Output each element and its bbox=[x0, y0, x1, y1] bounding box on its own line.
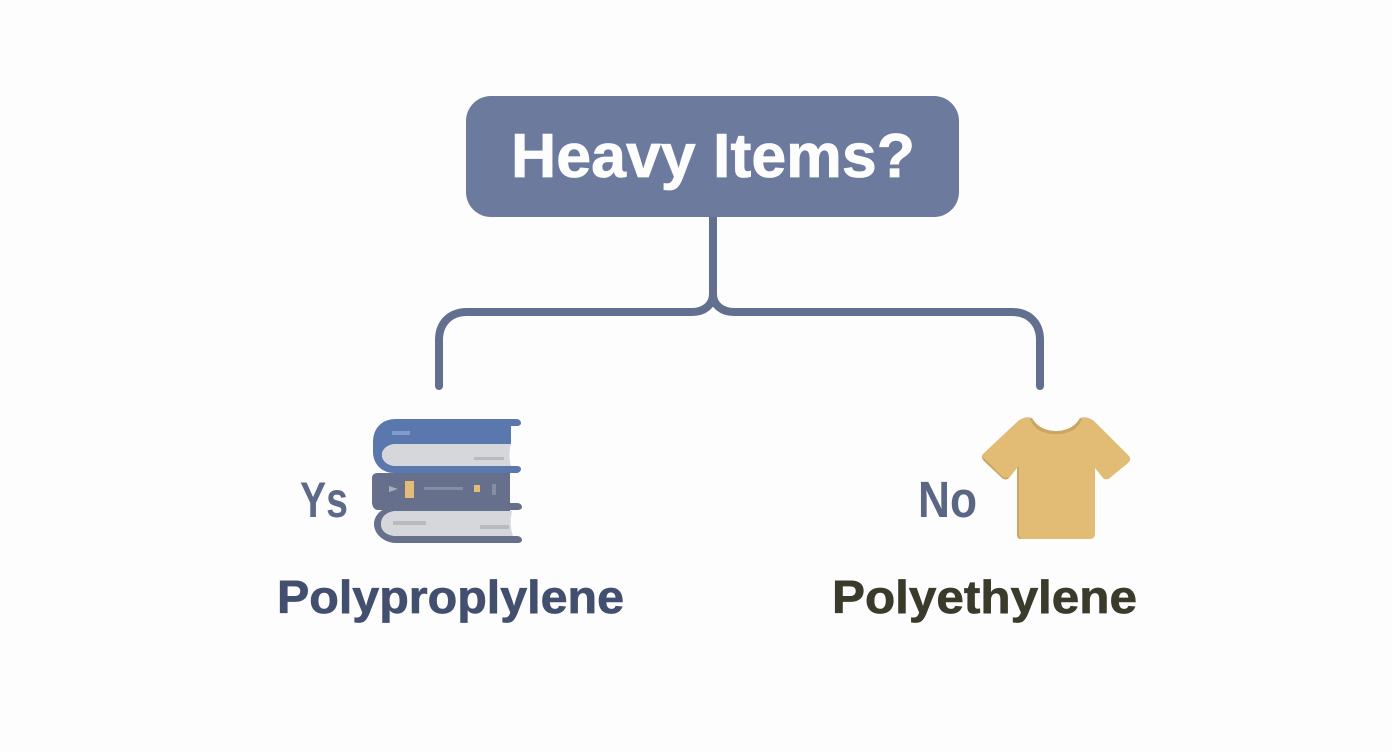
middle book bbox=[372, 473, 522, 510]
label: no: No bbox=[918, 471, 977, 528]
icon: t-shirt bbox=[982, 417, 1130, 539]
bottom book bbox=[374, 506, 522, 543]
heading: question box bbox=[466, 96, 959, 217]
heading: question box: Heavy Items? bbox=[511, 122, 915, 191]
label: product polypropylene: Polyproplylene bbox=[277, 571, 624, 623]
icon: stack of books bbox=[372, 419, 522, 543]
label: product polyethylene: Polyethylene bbox=[832, 571, 1137, 623]
label: yes: Ys bbox=[300, 472, 348, 528]
connector: branching lines bbox=[439, 216, 1040, 386]
top book bbox=[373, 419, 521, 473]
